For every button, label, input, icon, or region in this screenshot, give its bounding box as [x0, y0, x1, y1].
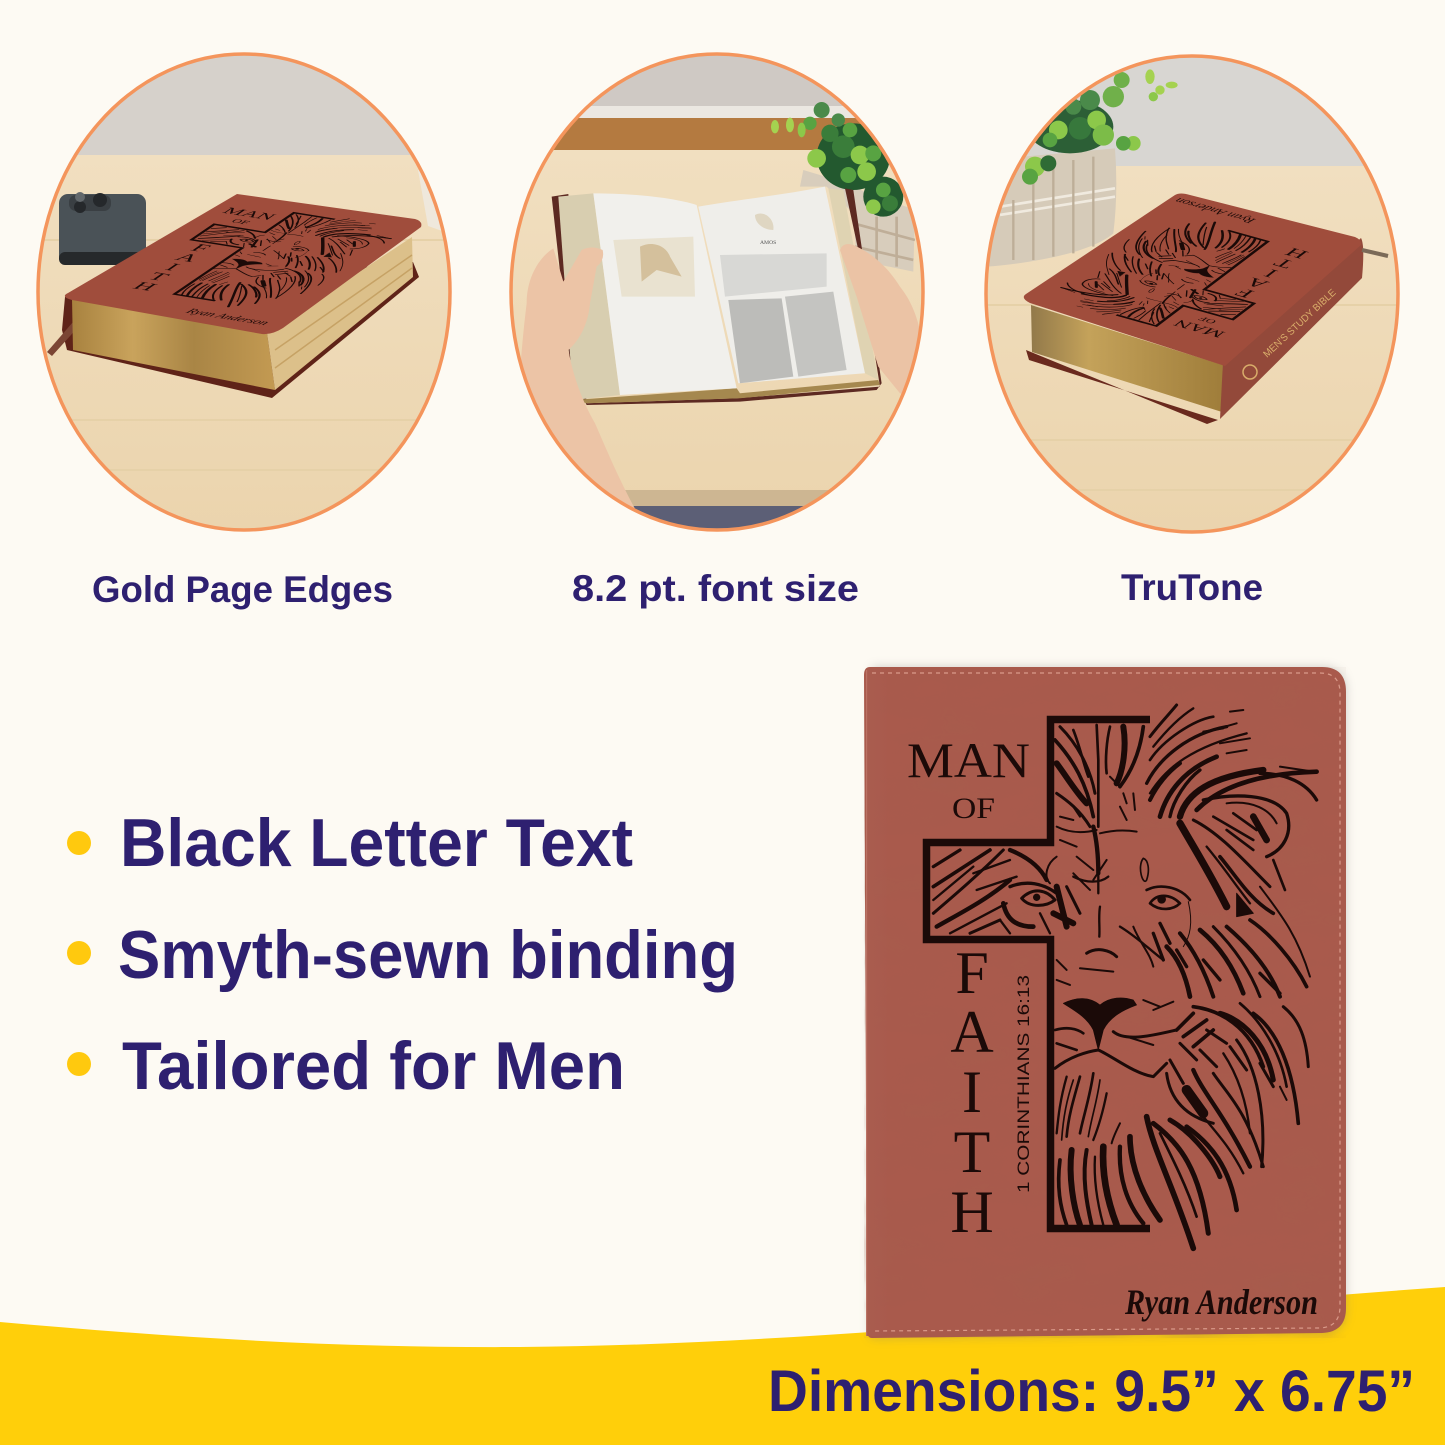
- book: front view with gilded pages: T: [143, 270, 174, 283]
- photo frame: [511, 54, 923, 530]
- book: spine view: [1024, 194, 1388, 424]
- verse reference: 1 CORINTHIANS 16:13: [1014, 975, 1033, 1193]
- book: spine view: T: [1269, 256, 1299, 271]
- title: man of faith: OF: [952, 792, 995, 825]
- book: spine view: Ryan Anderson: [1172, 196, 1260, 225]
- book: covers and page edges: [515, 187, 930, 523]
- icon: phone: [59, 192, 146, 265]
- title: man of faith: H: [950, 1179, 994, 1245]
- book: front view with gilded pages: [47, 194, 421, 398]
- book: spine view: MAN: [1169, 317, 1229, 340]
- icon: potted plant: [987, 69, 1178, 267]
- caption: gold page edges: Gold Page Edges: [92, 569, 393, 610]
- book: front view with gilded pages: MAN: [219, 205, 280, 222]
- book: front view with gilded pages: I: [161, 261, 185, 273]
- feature list: [67, 805, 738, 1104]
- feature: tailored for men: Tailored for Men: [122, 1028, 625, 1104]
- photo: TruTone cover: [980, 50, 1410, 536]
- yellow wave band: [0, 1287, 1445, 1445]
- photo frame: [38, 54, 450, 530]
- title: man of faith: [907, 732, 1030, 1245]
- personalized name: Ryan Anderson: [1124, 1282, 1318, 1322]
- lion and cross engraving: [926, 705, 1317, 1248]
- book: spine view: A: [1240, 275, 1273, 291]
- book: front view with gilded pages: Ryan Anderson: [182, 307, 272, 327]
- book: front view with gilded pages: F: [186, 241, 216, 254]
- photo frame: [986, 56, 1398, 532]
- title: man of faith: I: [962, 1059, 982, 1125]
- title: man of faith: MAN: [907, 732, 1030, 788]
- feature: smyth-sewn binding: Smyth-sewn binding: [118, 917, 738, 993]
- photo: gold page edges: [30, 50, 460, 535]
- dimensions: Dimensions: 9.5” x 6.75”: [768, 1359, 1415, 1424]
- book: covers and page edges: AMOS: [760, 240, 776, 246]
- title: man of faith: A: [950, 999, 994, 1065]
- book: spine view: I: [1259, 267, 1282, 280]
- feature: black letter text: Black Letter Text: [120, 805, 633, 881]
- book: front view with gilded pages: H: [128, 279, 162, 293]
- icon: left hand: [521, 248, 635, 508]
- book: spine view: H: [1280, 245, 1313, 261]
- large book cover: [864, 667, 1346, 1338]
- caption: TruTone: TruTone: [1121, 567, 1263, 608]
- icon: right hand: [840, 244, 919, 394]
- caption: font size: 8.2 pt. font size: [572, 568, 859, 609]
- title: man of faith: T: [954, 1119, 990, 1185]
- book: front view with gilded pages: A: [171, 251, 205, 264]
- book: front view with gilded pages: OF: [229, 218, 252, 226]
- title: man of faith: F: [955, 940, 989, 1006]
- photo: open bible: [500, 50, 930, 536]
- book: spine view: MEN'S STUDY BIBLE: [1262, 287, 1339, 360]
- book: spine view: F: [1230, 286, 1259, 301]
- icon: plant in basket: [771, 102, 915, 272]
- book: spine view: OF: [1197, 315, 1219, 324]
